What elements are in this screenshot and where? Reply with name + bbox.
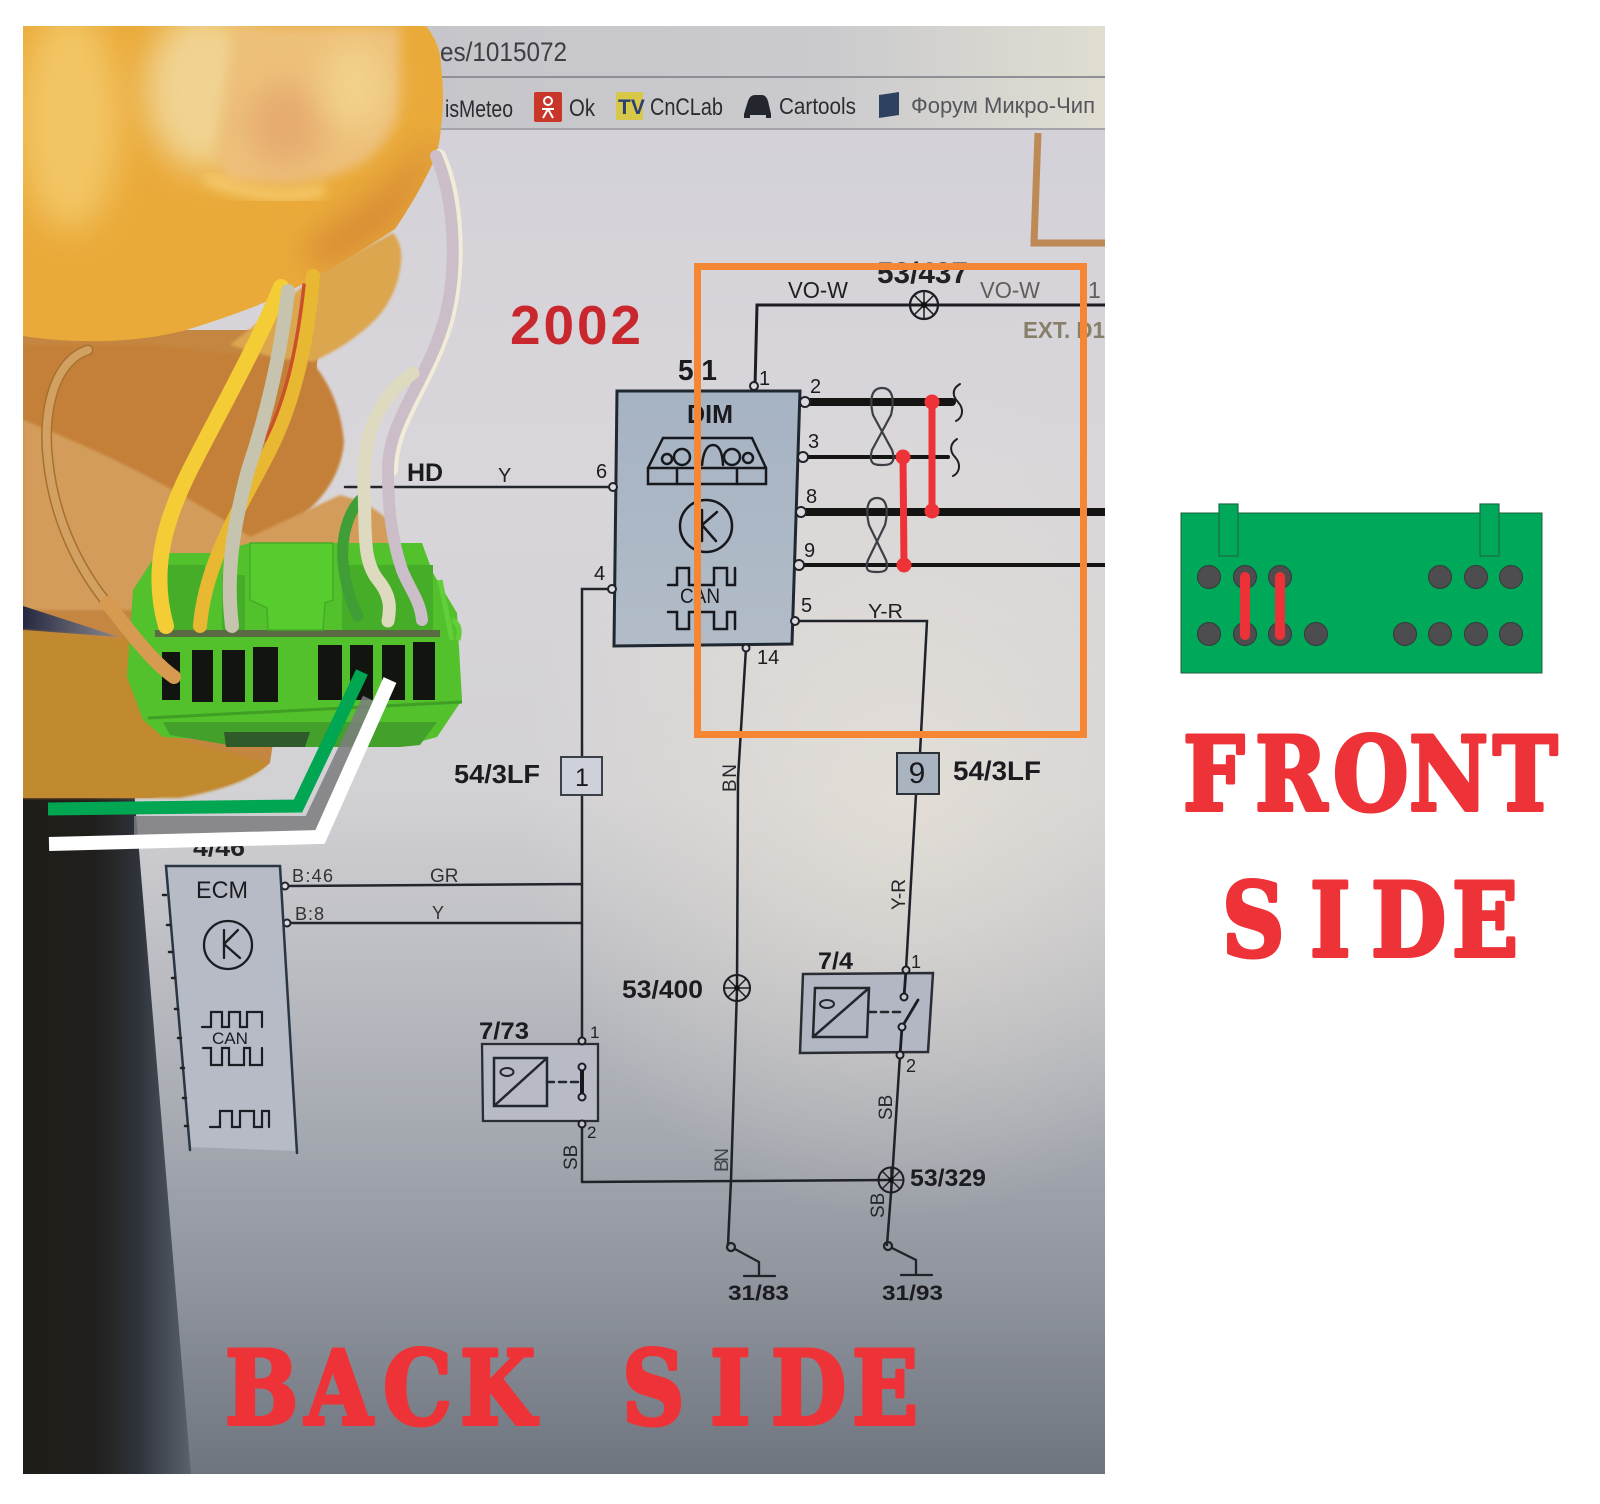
icon: ECM processor [204,921,252,969]
ECM waves [202,1012,269,1127]
wire break symbols [951,384,962,476]
heading: back side: BACK SIDE [225,1329,918,1449]
pins 7/73: 2 [587,1123,596,1142]
connector bottom rail [148,702,462,718]
browser address bar [426,26,1105,78]
rotated wire labels: BN [720,764,741,792]
thumb [20,10,453,356]
pin numbers: 8 [806,486,817,508]
label 53/437: 53/437 [877,257,968,290]
label EXT. D1: EXT. D1 [1023,317,1105,343]
pointer line white [49,680,390,844]
label 53/329: 53/329 [910,1165,986,1192]
icon: car [744,95,771,118]
connector label right: 54/3LF [953,756,1041,786]
rotated wire labels: SB [876,1095,897,1120]
green connector body [127,543,462,747]
heading: front: FRONT [1183,715,1558,835]
connector box 9 [897,753,939,794]
label 31/93: 31/93 [882,1282,943,1305]
pin numbers: 1 [759,368,770,390]
ECM pin labels: B:8 [295,904,324,924]
browser bookmarks bar: CnCLab [650,94,723,121]
wire Y-R [795,621,927,1245]
wire tan [47,350,174,677]
wire SB [582,1180,891,1182]
wire gray [230,291,288,626]
rotated wire labels: BN [712,1148,733,1172]
ground 31/83 [727,1243,775,1276]
wire green [343,498,362,616]
connector box 1 [561,757,602,795]
twist symbols [867,388,893,572]
thumb nail centre tone [247,83,323,167]
red jumper lines on diagram [896,394,940,572]
module DIM [614,391,800,646]
wiring diagram [163,257,1105,1305]
connector tab left [1219,504,1238,556]
pointer line green [48,672,362,809]
module DIM: DIM [687,399,733,429]
module label 5/1: 5/1 [678,355,717,387]
thumb lower right shading [300,130,441,273]
module DIM: CAN [680,585,720,608]
icon: processor [680,500,732,552]
finger four [23,420,400,610]
rotated wire labels: Y-R [889,879,910,910]
pin numbers: 14 [757,647,779,669]
pin numbers: 3 [808,431,819,453]
thick CAN wires [801,402,1105,512]
thumb left pale streaks [20,10,120,230]
wire BN [728,648,746,1245]
pin numbers: 5 [801,595,812,617]
dark gap between fingers [23,606,119,637]
label 7/4: 7/4 [818,948,854,975]
connector tab right [1480,504,1499,556]
label VO-W left: VO-W [788,277,848,303]
ECM pin labels: B:46 [292,866,333,886]
pins 7/4: 2 [906,1056,916,1076]
label Y: Y [498,465,511,487]
label VO-W right: VO-W [980,277,1040,303]
ground 31/93 [884,1242,932,1275]
ECM pin labels: Y [432,903,444,923]
connector windows [162,642,435,702]
jumper bars [1245,577,1280,635]
year label: 2002 [510,294,641,356]
module ECM: ECM [196,877,248,904]
thumb nail pale corner [323,40,387,130]
lower hand base [23,330,320,798]
connector label left: 54/3LF [454,759,540,789]
wire lilac and cream [388,156,456,620]
wires of the connector [47,156,456,677]
wire yellow [159,287,281,626]
label 7/73: 7/73 [479,1018,529,1045]
monitor screen background [23,130,1105,1474]
wire cream [364,373,413,621]
component 7/4 [800,966,933,1058]
thin CAN wires [799,457,1105,565]
left input wires [285,487,613,1182]
connector holes [1198,566,1522,646]
component 7/73 [482,1038,598,1128]
label Y-R: Y-R [868,601,903,623]
ECM pin labels: GR [430,866,458,887]
pins 7/4 [906,952,921,1076]
browser bookmarks bar: Ok [569,95,596,122]
browser bookmarks bar [440,78,1105,130]
CAN waves [668,568,735,629]
rotated wire labels: SB [868,1193,889,1218]
pins 7/73: 1 [590,1023,599,1042]
connector box 9: 9 [909,757,925,790]
module ECM [163,866,297,1153]
icon: Ok [534,92,562,122]
pin numbers: 6 [596,461,607,483]
heading: side: SIDE [1222,861,1518,981]
pin numbers [594,368,821,669]
panel: front side connector [1181,504,1542,673]
label HD: HD [407,459,443,487]
pins 7/4: 1 [911,952,921,972]
icon: splice 53/437 [910,291,938,319]
ECM pin labels [292,866,458,924]
module ECM: CAN [212,1029,248,1048]
icon: forum [879,92,899,118]
splice 53/329 [878,1168,904,1192]
wire yellow red [200,276,313,626]
rotated wire labels [561,764,910,1218]
browser bookmarks bar: Cartools [779,93,856,119]
label 53/400: 53/400 [622,976,703,1004]
browser bookmarks bar: Форум Микро-Чип [911,93,1095,118]
connector side clips [440,580,459,640]
finger two [230,233,401,362]
pointer lines shadow [134,700,372,826]
label 4/46: 4/46 [193,834,245,862]
top-right diagram frame fragment [1034,133,1105,243]
connector raised centre [250,543,333,630]
connector box 1: 1 [575,764,589,792]
pin 1 right: 1 [1088,277,1101,303]
browser bookmarks bar: isMeteo [445,96,513,123]
connector base slots [224,732,310,747]
browser address bar: es/1015072 [440,37,567,67]
splice 53/400 [724,975,750,1001]
thumb nail rim highlight [205,178,325,195]
pin numbers: 4 [594,563,605,585]
thumb pale highlight [145,10,265,170]
finger three [23,345,344,542]
connector dark base [163,722,437,747]
icon: instrument cluster [648,438,766,484]
hand holding connector [20,10,453,798]
connector shadow sockets [160,565,433,635]
pins 7/73 [587,1023,599,1142]
label 31/83: 31/83 [728,1282,789,1305]
photo: monitor with wiring diagram and hand holding connector [23,26,1105,1474]
icon: TV: TV [618,96,645,119]
rotated wire labels: SB [561,1145,582,1170]
pin markers [282,382,810,926]
pin numbers: 9 [804,540,815,562]
pin numbers: 2 [810,376,821,398]
wire VO-W [755,305,1105,387]
orange highlight rectangle [698,266,1084,734]
thumb nail [215,26,400,185]
finger five [23,630,268,798]
